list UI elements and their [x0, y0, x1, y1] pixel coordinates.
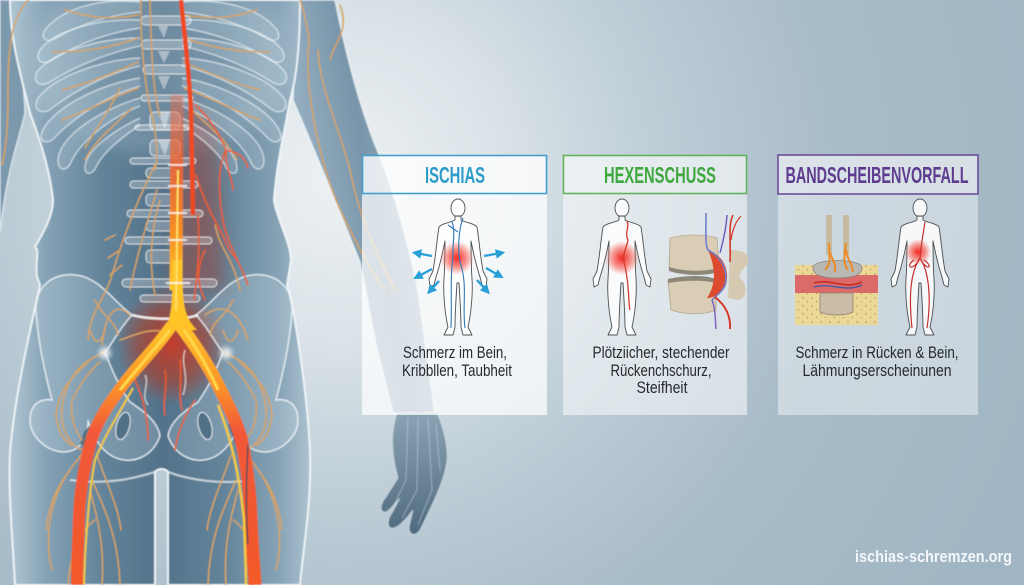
panel: Ischias [362, 155, 547, 415]
text: symptoms [592, 343, 730, 397]
left arm [0, 0, 25, 232]
text: symptoms: Lähmungserscheinunen [802, 361, 952, 380]
icon: vertebrae and nerves [668, 213, 748, 329]
heading: Ischias [362, 156, 546, 194]
text: symptoms: Schmerz in Rücken & Bein, [796, 343, 958, 362]
icon: body with lower back pain [593, 199, 651, 335]
icon: herniated disc cross-section [795, 215, 878, 325]
hip shine [70, 472, 255, 482]
icon: body with back and leg pain [891, 199, 949, 335]
hand [381, 413, 447, 534]
lighter chest area [31, 0, 291, 155]
card background [563, 155, 747, 415]
anatomical body illustration [0, 0, 447, 585]
red nerve branches [135, 105, 248, 450]
sciatic nerve right [180, 325, 255, 585]
heading: Bandscheibenvorfall [778, 155, 978, 194]
spinal cord [165, 0, 197, 330]
text: symptoms [796, 343, 958, 380]
rib cage [35, 1, 287, 173]
panel: Bandscheibenvorfall [778, 155, 978, 415]
spinal glow [170, 100, 225, 290]
right arm [293, 0, 435, 413]
text: symptoms: Kribbllen, Taubheit [402, 361, 512, 380]
text: symptoms: Plötziicher, stechender [592, 343, 730, 362]
heading: Hexenschuss [564, 156, 746, 194]
spine vertebrae [122, 16, 217, 302]
card background [778, 155, 978, 415]
card background [362, 155, 547, 415]
torso and legs [9, 0, 310, 585]
icon: body with radiating pain [416, 199, 501, 335]
sciatic nerve left [77, 325, 172, 585]
tan nerves [2, 0, 395, 345]
text: symptoms: Rückenchschurz, [610, 361, 712, 380]
panel: Hexenschuss [563, 155, 748, 415]
text: symptoms [402, 343, 512, 380]
pelvis [30, 275, 298, 585]
text: symptoms: Schmerz im Bein, [403, 343, 507, 362]
heading: Ischias: ISCHIAS [425, 162, 485, 188]
heading: Hexenschuss: HEXENSCHUSS [604, 162, 716, 188]
text: symptoms: Steifheit [636, 378, 688, 397]
